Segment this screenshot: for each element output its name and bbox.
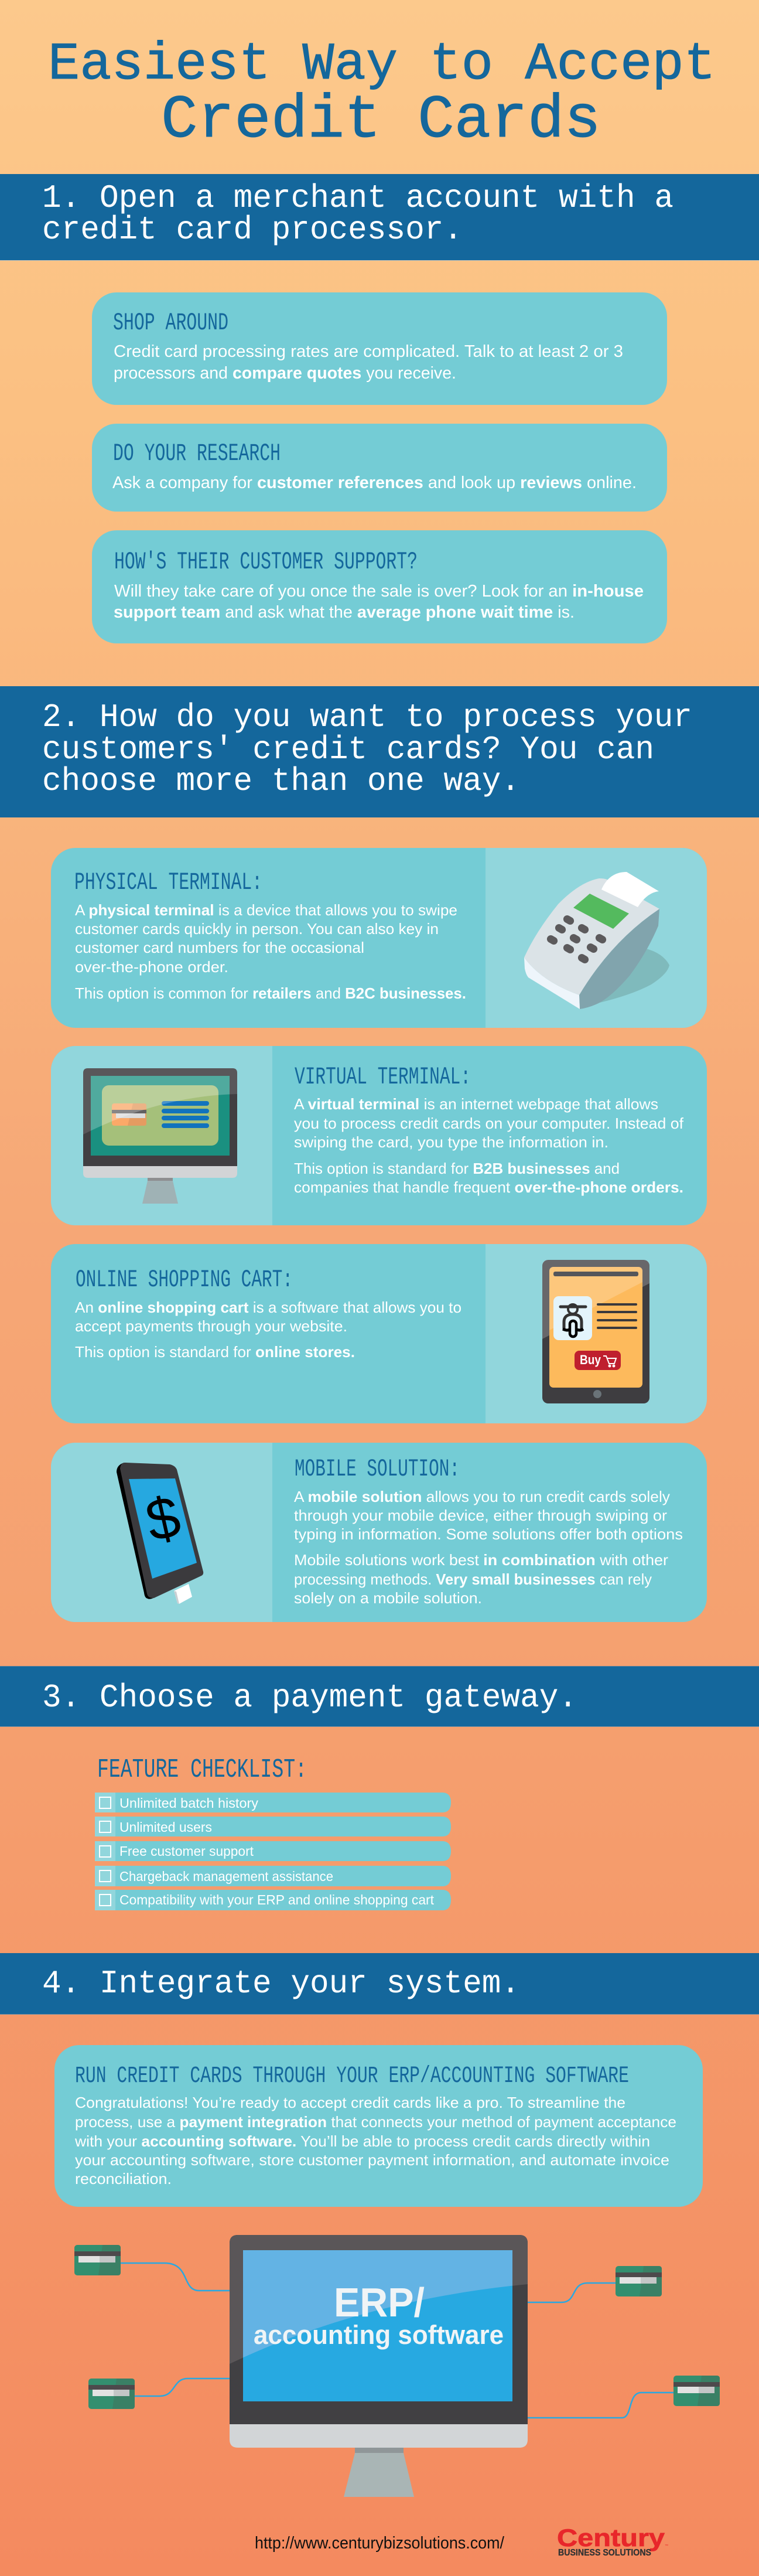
section 2 heading band xyxy=(0,686,759,817)
icon: credit card top left xyxy=(74,2245,121,2275)
text: physical terminal description: A physical terminal is a device that allows you to swipe xyxy=(75,901,457,919)
checklist item: unlimited users: Unlimited users xyxy=(119,1819,212,1835)
text: online shopping cart description: An online shopping cart is a software that allows you to xyxy=(75,1299,461,1316)
section 4 heading band xyxy=(0,1953,759,2015)
text: physical terminal description: over-the-phone order. xyxy=(75,958,228,976)
icon: phone with card reader xyxy=(117,1463,203,1604)
text: online shopping cart description: accept payments through your website. xyxy=(75,1317,347,1335)
text: physical terminal description: This option is common for retailers and B2C businesses. xyxy=(75,984,466,1002)
title xyxy=(48,35,716,155)
checklist item: free customer support xyxy=(95,1841,451,1861)
section 2 heading band: 2. How do you want to process your xyxy=(42,698,692,736)
section 1 heading band: 1. Open a merchant account with a xyxy=(42,179,673,217)
panel: virtual terminal xyxy=(51,1046,707,1225)
text: mobile solution description: A mobile solution allows you to run credit cards solely xyxy=(294,1488,670,1505)
panel: shop around xyxy=(92,292,667,405)
text: integration description: with your accounting software. You’ll be able to process credit cards directly within xyxy=(74,2132,650,2150)
footer url: http://www.centurybizsolutions.com/ xyxy=(255,2534,505,2553)
text: ERP: ERP/ xyxy=(334,2279,425,2325)
heading: online shopping cart: ONLINE SHOPPING CART: xyxy=(76,1266,293,1294)
text: mobile solution description xyxy=(294,1488,683,1607)
checklist item: chargeback management: Chargeback management assistance xyxy=(119,1869,333,1884)
text: physical terminal description: customer cards quickly in person. You can also key in xyxy=(75,920,439,938)
panel: customer support: Will they take care of you once the sale is over? Look for an in-house xyxy=(114,582,644,601)
text: integration description: Congratulations! You’re ready to accept credit cards like a pro. To streamline the xyxy=(75,2094,625,2111)
logo: Century Business Solutions: ™ xyxy=(665,2544,668,2548)
text: physical terminal description xyxy=(75,901,466,1002)
icon: card terminal xyxy=(524,872,669,1009)
section 3 heading band xyxy=(0,1666,759,1727)
icon: scooter xyxy=(560,1304,586,1337)
section 2 heading band: customers' credit cards? You can xyxy=(42,731,654,768)
text: physical terminal description: customer card numbers for the occasional xyxy=(75,939,364,956)
panel: do your research: Ask a company for customer references and look up reviews online. xyxy=(112,473,637,492)
text: integration description: process, use a payment integration that connects your method of payment acceptance xyxy=(75,2113,676,2131)
text: virtual terminal description: swiping the card, you type the information in. xyxy=(294,1133,608,1151)
title: Credit Cards xyxy=(161,86,601,155)
checklist item: unlimited batch history: Unlimited batch history xyxy=(119,1795,258,1811)
text: online shopping cart description: This option is standard for online stores. xyxy=(75,1343,355,1361)
heading: feature checklist: FEATURE CHECKLIST: xyxy=(97,1755,307,1785)
text: virtual terminal description: you to process credit cards on your computer. Instead of xyxy=(294,1115,684,1132)
text: buy button label: Buy xyxy=(580,1352,601,1367)
illustration: ERP monitor xyxy=(230,2235,528,2497)
checklist item: chargeback management xyxy=(95,1866,451,1886)
panel: do your research: DO YOUR RESEARCH xyxy=(113,439,281,468)
panel: do your research xyxy=(92,424,667,512)
section 2 heading band: choose more than one way. xyxy=(42,762,520,800)
text: dollar sign: $ xyxy=(140,1483,186,1555)
checklist xyxy=(95,1793,451,1910)
text: integration description: reconciliation. xyxy=(75,2170,172,2187)
panel: online shopping cart xyxy=(51,1244,707,1423)
heading: mobile solution: MOBILE SOLUTION: xyxy=(295,1455,460,1483)
checklist item: compatibility: Compatibility with your ERP and online shopping cart xyxy=(119,1892,434,1907)
text: accounting software: accounting software xyxy=(254,2320,504,2350)
checklist item: compatibility xyxy=(95,1890,451,1910)
section 1 heading band xyxy=(0,174,759,261)
panel: shop around: SHOP AROUND xyxy=(113,309,228,337)
panel: customer support: HOW'S THEIR CUSTOMER SUPPORT? xyxy=(114,548,418,576)
text: mobile solution description: through your mobile device, either through swiping or xyxy=(294,1507,667,1524)
panel: customer support: support team and ask what the average phone wait time is. xyxy=(114,603,575,622)
heading: physical terminal: PHYSICAL TERMINAL: xyxy=(74,868,262,897)
text: virtual terminal description: A virtual terminal is an internet webpage that allows xyxy=(294,1095,658,1113)
icon: desktop monitor with card form xyxy=(83,1068,237,1204)
checklist item: free customer support: Free customer support xyxy=(119,1844,254,1859)
panel: physical terminal xyxy=(51,848,707,1028)
logo: Century Business Solutions: BUSINESS SOLUTIONS xyxy=(558,2548,651,2558)
text: mobile solution description: solely on a mobile solution. xyxy=(294,1589,482,1607)
text: mobile solution description: processing methods. Very small businesses can rely xyxy=(294,1570,652,1588)
text: online shopping cart description xyxy=(75,1299,461,1361)
text: integration description: your accounting software, store customer payment information, and automate invoice xyxy=(75,2151,669,2169)
checklist item: unlimited batch history xyxy=(95,1793,451,1812)
icon: credit card bottom right xyxy=(673,2376,720,2406)
logo: Century Business Solutions: Century xyxy=(557,2524,665,2551)
text: virtual terminal description: companies that handle frequent over-the-phone orders. xyxy=(294,1178,683,1196)
icon: credit card bottom left xyxy=(88,2379,135,2409)
icon: credit card top right xyxy=(616,2266,662,2296)
checklist item: unlimited users xyxy=(95,1817,451,1836)
section 3 heading band: 3. Choose a payment gateway. xyxy=(42,1679,577,1716)
text: virtual terminal description: This option is standard for B2B businesses and xyxy=(294,1160,620,1177)
panel: shop around: processors and compare quotes you receive. xyxy=(114,364,456,383)
text: mobile solution description: Mobile solutions work best in combination with other xyxy=(294,1551,668,1569)
wires from cards to monitor xyxy=(121,2263,673,2418)
logo: Century Business Solutions xyxy=(557,2524,668,2558)
section 4 heading band: 4. Integrate your system. xyxy=(42,1965,520,2002)
title: Easiest Way to Accept xyxy=(48,35,716,95)
section 1 heading band: credit card processor. xyxy=(42,211,463,248)
heading: virtual terminal: VIRTUAL TERMINAL: xyxy=(295,1063,471,1091)
panel: shop around: Credit card processing rates are complicated. Talk to at least 2 or 3 xyxy=(114,342,623,361)
icon: cart xyxy=(603,1356,616,1367)
panel: mobile solution xyxy=(51,1443,707,1622)
text: virtual terminal description xyxy=(294,1095,684,1196)
text: integration description xyxy=(74,2094,676,2187)
panel: customer support xyxy=(92,530,667,643)
icon: tablet with buy button xyxy=(542,1260,649,1403)
panel: run credit cards through ERP xyxy=(54,2045,703,2207)
text: mobile solution description: typing in information. Some solutions offer both options xyxy=(294,1525,683,1543)
